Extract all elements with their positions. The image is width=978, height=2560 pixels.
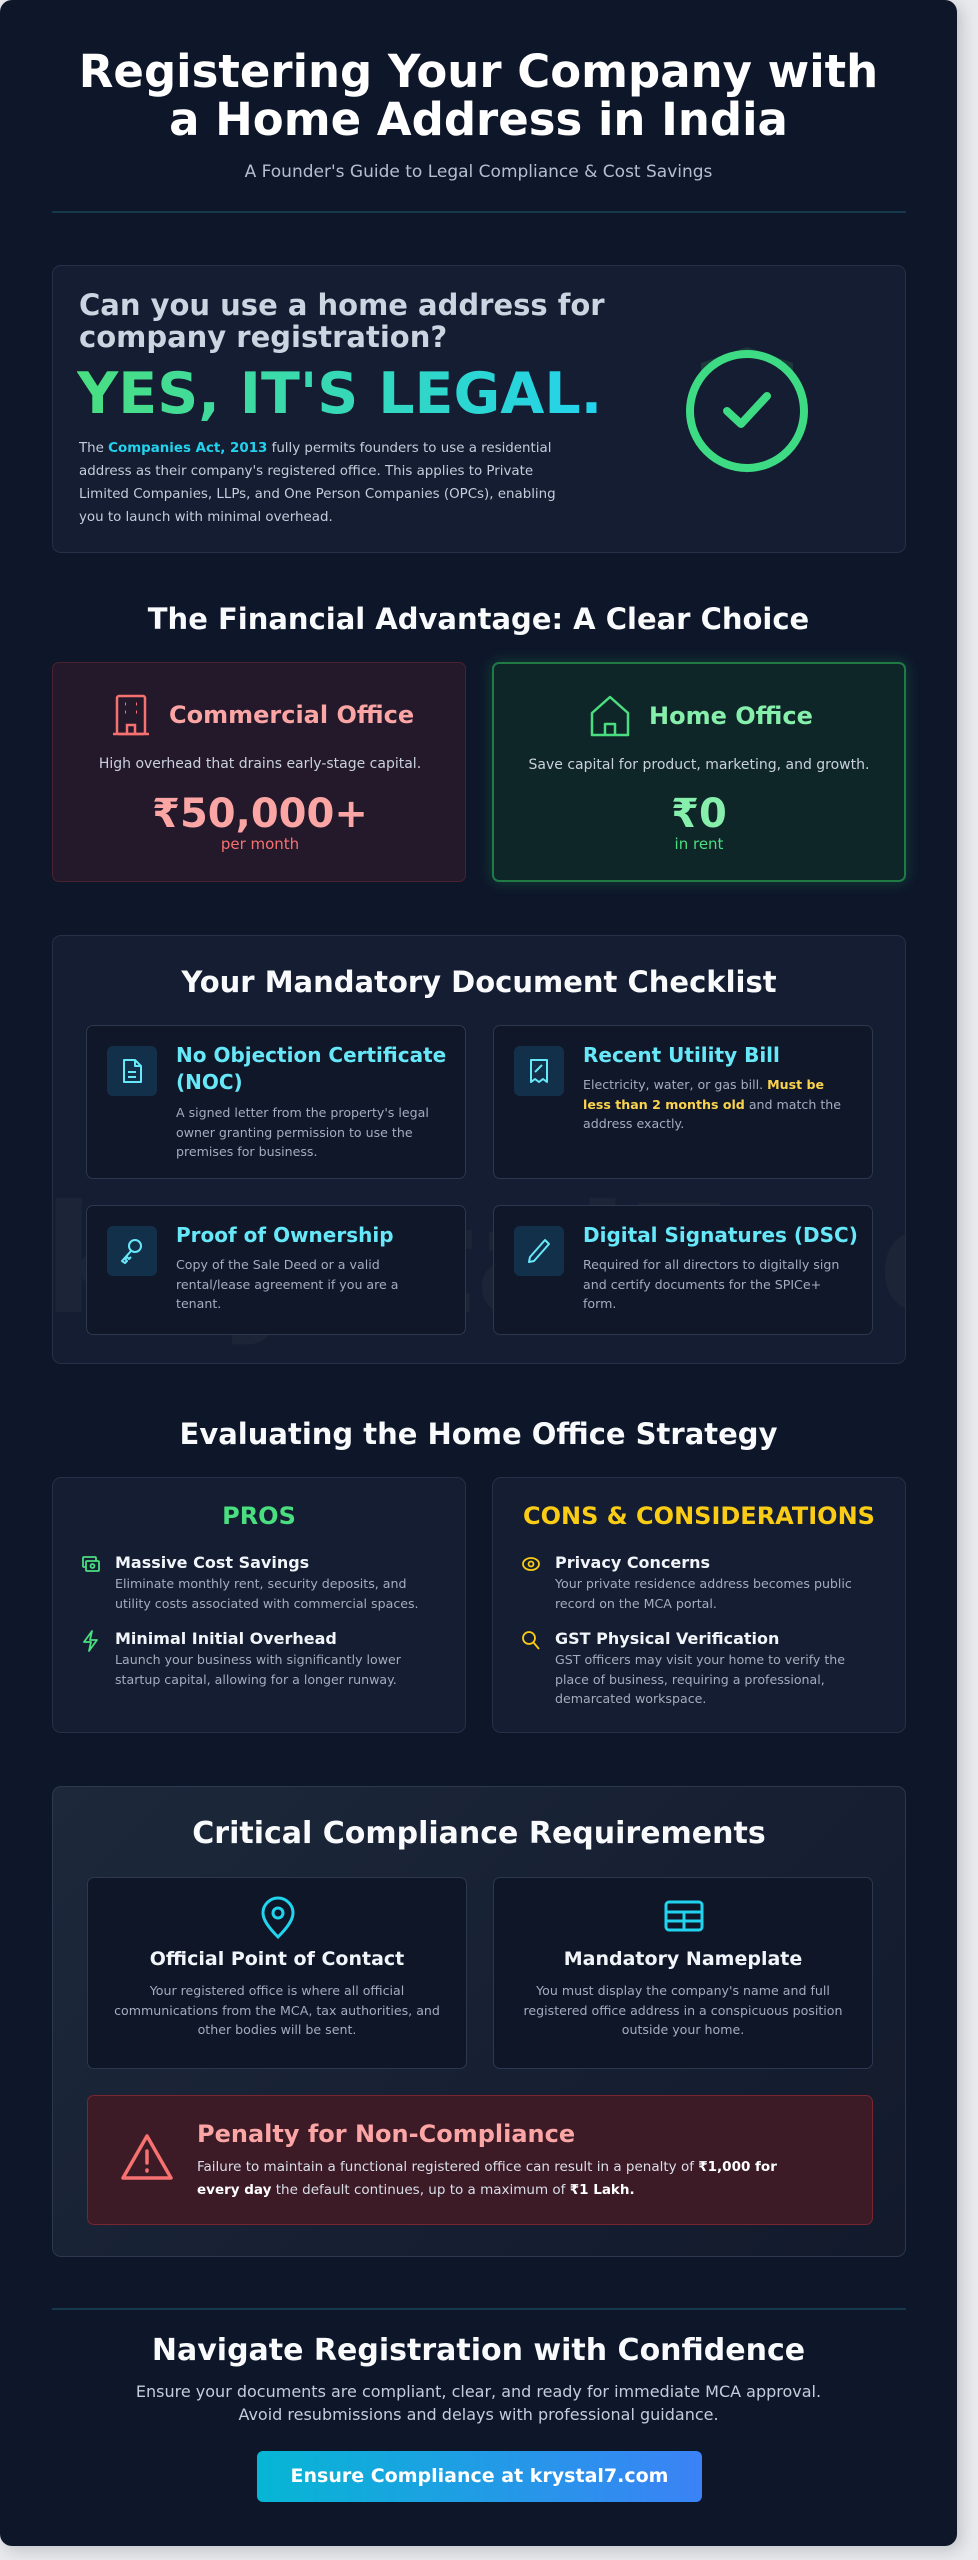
req: point of contact: Official Point of Contact: [150, 1948, 404, 1970]
doc: NOC: A signed letter from the property's legal owner granting permission to use the premises for business.: [176, 1105, 429, 1159]
pro item: overhead: Launch your business with significantly lower startup capital, allowing for a longer runway.: [115, 1652, 401, 1686]
req: point of contact: [87, 1877, 467, 2069]
doc: proof of ownership: Copy of the Sale Deed or a valid rental/lease agreement if you are a tenant.: [176, 1257, 399, 1311]
doc: utility bill: Electricity, water, or gas bill. Must be less than 2 months old and match the address exactly.: [583, 1077, 841, 1131]
doc: DSC: [493, 1205, 873, 1335]
pros heading: PROS: [222, 1502, 296, 1530]
unit: per month: [221, 835, 299, 853]
panel: commercial office: [52, 662, 466, 882]
title: a Home Address in India: [169, 93, 788, 146]
yes its legal: YES, IT'S LEGAL.: [77, 361, 602, 427]
icon: building: [113, 694, 149, 736]
price: ₹0: [671, 791, 727, 837]
callout: penalty: Penalty for Non-Compliance: [197, 2120, 575, 2148]
paragraph: The Companies Act, 2013 fully permits founders to use a residential address as their company's registered office. This applies to Private Limited Companies, LLPs, and One Person Companies (OPCs), enabling you to launch with minimal overhead.: [79, 441, 556, 525]
CTA button: Ensure Compliance at krystal7.com: [291, 2465, 668, 2487]
pro item: overhead: Minimal Initial Overhead: [115, 1629, 337, 1648]
callout: penalty: Failure to maintain a functional registered office can result in a penalty of ₹1,000 for every day the default continues, up to a maximum of ₹1 Lakh.: [197, 2159, 777, 2198]
icon: house: [590, 696, 630, 736]
icon: warning: [121, 2134, 173, 2180]
con item: privacy: Privacy Concerns: [555, 1553, 710, 1572]
title: Commercial Office: [169, 701, 414, 729]
con item: GST: [522, 1629, 845, 1706]
unit: in rent: [675, 835, 723, 853]
panel: hero legal: [52, 265, 906, 553]
pro item: overhead: [83, 1629, 401, 1686]
title: [79, 45, 878, 146]
doc: NOC: [86, 1025, 466, 1179]
panel: pros: [52, 1477, 466, 1733]
description: High overhead that drains early-stage capital.: [99, 756, 421, 772]
req: point of contact: Your registered office is where all official communications from the MCA, tax authorities, and other bodies will be sent.: [114, 1983, 440, 2037]
title: Registering Your Company with: [79, 45, 878, 98]
icon: location pin: [262, 1896, 294, 1939]
CTA text: Ensure your documents are compliant, clear, and ready for immediate MCA approval.: [136, 2382, 821, 2401]
doc: utility bill: [493, 1025, 873, 1179]
CTA text: Avoid resubmissions and delays with professional guidance.: [238, 2404, 719, 2424]
heading: Your Mandatory Document Checklist: [181, 965, 777, 999]
con item: GST: GST Physical Verification: [555, 1629, 779, 1648]
heading: CTA: Navigate Registration with Confidence: [152, 2333, 805, 2368]
description: Save capital for product, marketing, and growth.: [529, 757, 869, 773]
panel: compliance requirements: [52, 1786, 906, 2257]
subtitle: A Founder's Guide to Legal Compliance & Cost Savings: [245, 162, 712, 182]
heading: financial advantage: The Financial Advantage: A Clear Choice: [148, 602, 809, 636]
req: nameplate: [493, 1877, 873, 2069]
pro item: cost savings: [82, 1553, 419, 1610]
doc: NOC: No Objection Certificate (NOC): [176, 1043, 446, 1094]
icon: shield check: [686, 347, 808, 473]
title: Home Office: [649, 702, 813, 730]
panel: home office: [492, 662, 906, 882]
doc: DSC: Digital Signatures (DSC): [583, 1223, 858, 1247]
pro item: cost savings: Eliminate monthly rent, security deposits, and utility costs associated with commercial spaces.: [115, 1576, 419, 1610]
callout: penalty: [87, 2095, 873, 2225]
icon: pen: [514, 1226, 564, 1276]
icon: key: [107, 1226, 157, 1276]
question heading: Can you use a home address for company registration?: [79, 288, 605, 354]
doc: DSC: Required for all directors to digitally sign and certify documents for the SPICe+ form.: [583, 1257, 839, 1311]
cons heading: CONS & CONSIDERATIONS: [523, 1502, 875, 1530]
panel: cons: [492, 1477, 906, 1733]
doc: utility bill: Recent Utility Bill: [583, 1043, 780, 1067]
doc: proof of ownership: [86, 1205, 466, 1335]
req: nameplate: You must display the company's name and full registered office address in a conspicuous position outside your home.: [524, 1983, 842, 2037]
con item: privacy: Your private residence address becomes public record on the MCA portal.: [555, 1576, 852, 1610]
con item: GST: GST officers may visit your home to verify the place of business, requiring a professional, demarcated workspace.: [555, 1652, 845, 1706]
doc: proof of ownership: Proof of Ownership: [176, 1223, 394, 1247]
icon: receipt: [514, 1046, 564, 1096]
req: nameplate: Mandatory Nameplate: [564, 1948, 802, 1970]
heading: evaluating: Evaluating the Home Office Strategy: [180, 1417, 777, 1451]
icon: nameplate: [664, 1900, 704, 1932]
heading: Critical Compliance Requirements: [192, 1816, 766, 1851]
icon: document: [107, 1046, 157, 1096]
con item: privacy: [522, 1553, 852, 1610]
price: ₹50,000+: [152, 791, 368, 837]
panel: document checklist: [52, 935, 906, 1364]
CTA text: [136, 2382, 821, 2424]
pro item: cost savings: Massive Cost Savings: [115, 1553, 309, 1572]
CTA button: [257, 2451, 702, 2502]
